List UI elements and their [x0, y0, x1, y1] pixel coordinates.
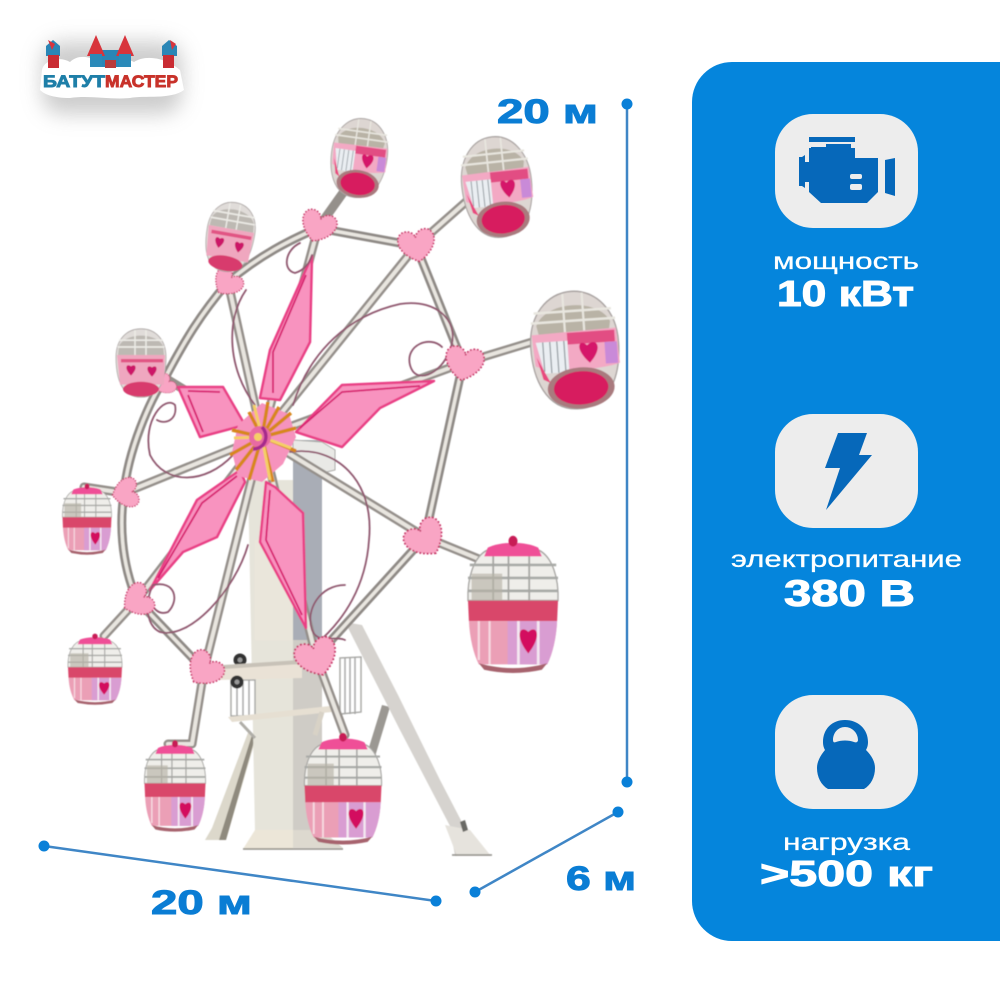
logo left tower: [46, 40, 60, 68]
gondola 1: [326, 115, 392, 201]
blade: down: [260, 482, 306, 628]
blade: up: [260, 256, 312, 400]
logo castle: [87, 35, 134, 68]
logo wordmark: МАСТЕР: [105, 72, 178, 91]
blade: lower left: [150, 470, 245, 590]
spec: load: [760, 695, 933, 894]
back support leg: [366, 705, 390, 760]
gondola 9: [304, 733, 382, 845]
decorative wire scrolls: [148, 243, 453, 645]
central hub: [230, 402, 296, 482]
load label: нагрузка: [783, 829, 910, 855]
panel: specifications: [692, 62, 1000, 941]
gondola 6: [62, 484, 112, 555]
logo clouds: [40, 57, 184, 98]
width label: 20 м: [151, 884, 252, 922]
gondola 7: [68, 634, 122, 705]
electricity label: электропитание: [731, 546, 962, 572]
tower: [243, 440, 343, 849]
spec: power: [773, 114, 919, 314]
gondola 4: [527, 288, 623, 412]
ferris wheel illustration: [62, 115, 623, 856]
lamps: [230, 654, 246, 688]
heart joints: [110, 207, 486, 694]
left support leg: [205, 730, 256, 840]
gondola 3: [200, 199, 260, 275]
gondola 8: [144, 740, 206, 832]
gondola 2: [457, 133, 537, 241]
service platform: [218, 654, 361, 738]
gondola 5: [116, 329, 166, 397]
blade: right: [296, 381, 434, 447]
logo right tower: [162, 40, 177, 68]
pink blades: [150, 256, 434, 628]
spec: electricity: [731, 414, 962, 614]
power label: мощность: [773, 248, 919, 274]
icon: kettlebell: [775, 695, 918, 809]
power value: 10 кВт: [777, 273, 914, 314]
depth dimension: [470, 806, 636, 898]
load value: >500 кг: [760, 853, 933, 894]
width dimension: [38, 840, 442, 922]
icon: lightning bolt: [775, 414, 918, 528]
gondola 10: [468, 536, 558, 673]
logo: БатутМастер: [40, 35, 184, 114]
icon: engine: [775, 114, 918, 228]
rim and spokes: [84, 190, 532, 744]
electricity value: 380 В: [784, 573, 915, 614]
height dimension: [497, 93, 632, 788]
height label: 20 м: [497, 93, 598, 131]
blade: upper left: [178, 387, 245, 437]
logo wordmark: БАТУТ: [43, 72, 106, 91]
depth label: 6 м: [566, 860, 636, 898]
right support leg: [345, 622, 491, 856]
